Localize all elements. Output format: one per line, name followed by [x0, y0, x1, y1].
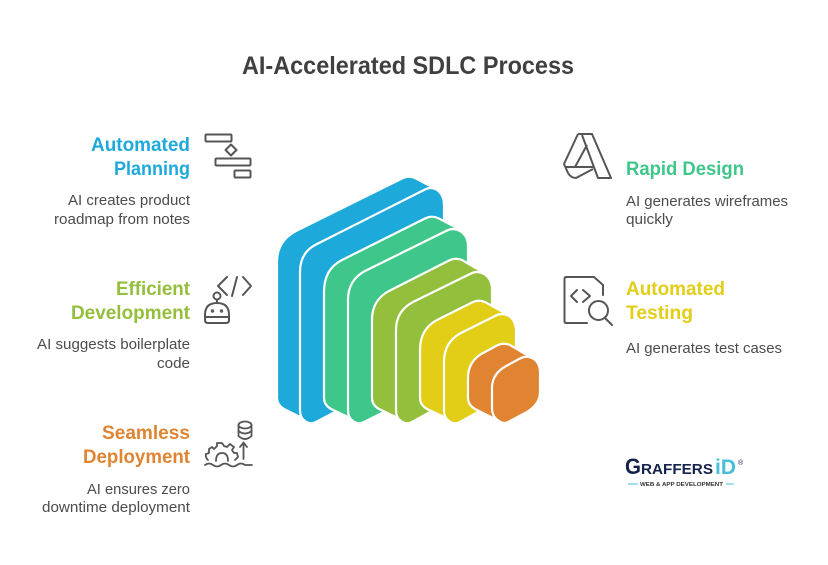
step: automated testing — [626, 279, 782, 357]
step: efficient development — [37, 279, 191, 372]
step: seamless deployment: downtime deployment — [42, 500, 190, 516]
title: AI-Accelerated SDLC Process — [242, 52, 574, 80]
logo: GraffersiD — [625, 454, 744, 488]
step: rapid design — [626, 159, 788, 228]
step: automated testing: AI generates test cases — [626, 341, 782, 357]
orange front slab — [492, 357, 540, 423]
logo: GraffersiD: iD — [715, 456, 736, 479]
step: automated testing: Automated — [626, 279, 725, 300]
logo: GraffersiD: G — [625, 454, 641, 479]
icon: angular A logo — [564, 134, 611, 178]
green back slab — [324, 217, 455, 418]
olive back slab — [372, 259, 479, 418]
orange back slab — [468, 344, 527, 419]
logo: GraffersiD: RAFFERS — [641, 461, 713, 478]
step: efficient development: code — [157, 356, 190, 372]
blue front slab — [300, 188, 444, 423]
logo: GraffersiD: WEB & APP DEVELOPMENT — [640, 482, 724, 488]
icon: gantt chart — [206, 134, 250, 178]
step: efficient development: Efficient — [116, 279, 191, 300]
step: rapid design: AI generates wireframes — [626, 194, 788, 210]
step: seamless deployment: AI ensures zero — [87, 482, 190, 498]
step: automated planning: roadmap from notes — [54, 212, 190, 228]
step: efficient development: AI suggests boilerplate — [37, 337, 190, 353]
yellow back slab — [420, 301, 503, 418]
step: efficient development: Development — [71, 303, 191, 324]
step: automated planning — [54, 135, 190, 228]
icon: robot with code — [205, 277, 251, 323]
icon: gear, waves and database — [205, 422, 252, 466]
step: automated planning: Automated — [91, 135, 190, 156]
step: automated planning: AI creates product — [68, 193, 190, 209]
blue back slab — [277, 177, 432, 418]
icon: code file with magnifier — [564, 277, 612, 325]
step: automated planning: Planning — [114, 159, 190, 180]
step: rapid design: Rapid Design — [626, 159, 744, 180]
logo: GraffersiD: ® — [738, 459, 744, 467]
green front slab — [348, 229, 468, 423]
step: automated testing: Testing — [626, 303, 693, 324]
step: rapid design: quickly — [626, 212, 674, 228]
step: seamless deployment — [42, 423, 191, 516]
step: seamless deployment: Seamless — [102, 423, 190, 444]
olive front slab — [396, 272, 492, 423]
layered stack diagram — [277, 177, 540, 423]
step: seamless deployment: Deployment — [83, 447, 191, 468]
yellow front slab — [444, 314, 516, 423]
